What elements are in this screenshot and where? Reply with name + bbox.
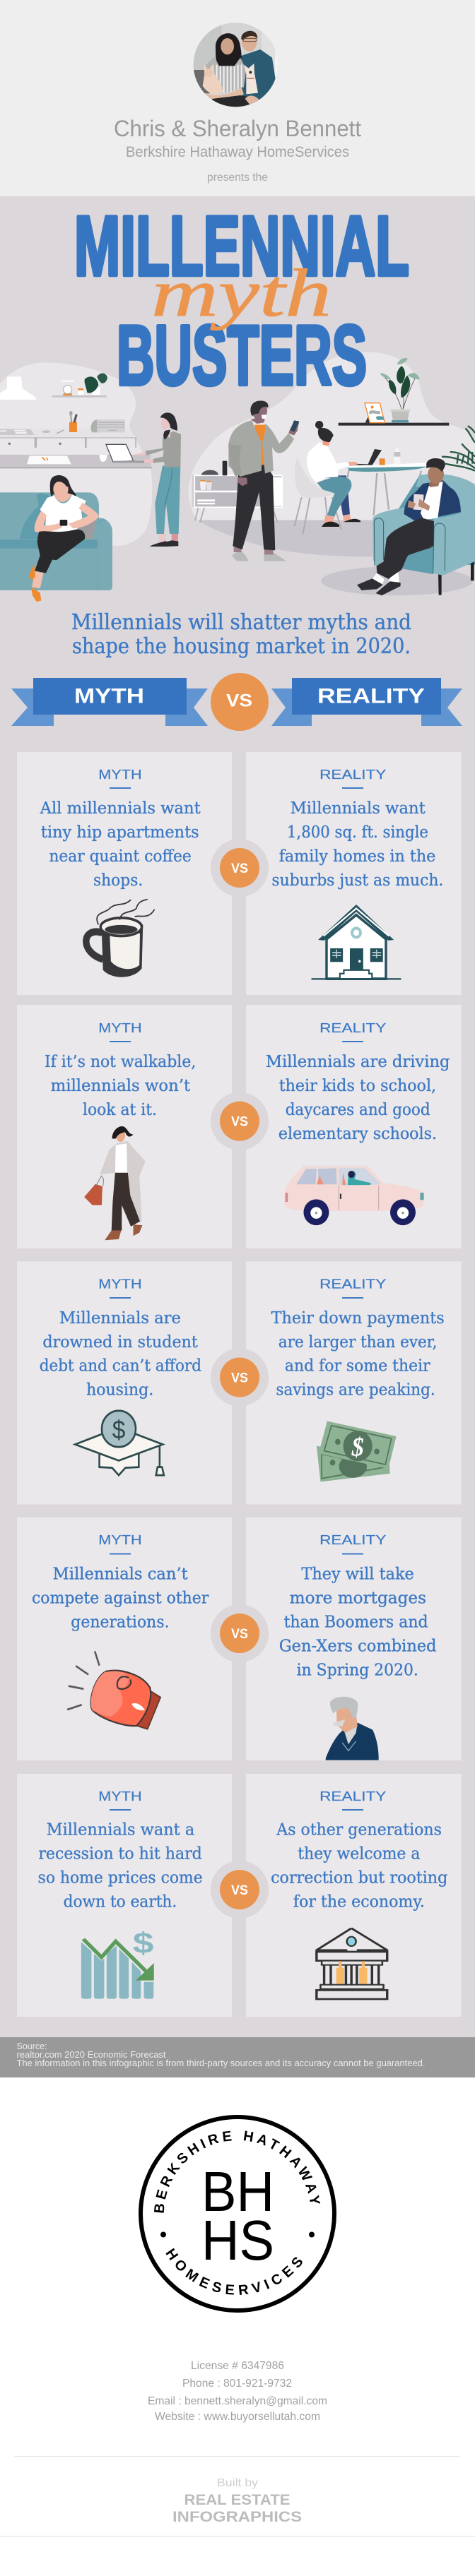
seated woman at table — [307, 421, 360, 527]
utensils — [69, 411, 77, 432]
reality label: REALITY — [319, 1789, 386, 1803]
contact details: Phone : 801-921-9732 — [182, 2378, 292, 2390]
living room illustration — [192, 358, 475, 595]
reality text: their kids to school, — [279, 1077, 436, 1095]
vs badge 2: VS — [231, 1115, 248, 1130]
island — [0, 455, 152, 468]
panel: myth 2 — [17, 1005, 232, 1248]
kitchen illustration — [0, 374, 181, 602]
ribbon: myth — [11, 678, 208, 726]
reality text: more mortgages — [290, 1589, 426, 1607]
myth text: generations. — [71, 1613, 170, 1631]
panel: reality 2 — [246, 1005, 462, 1248]
myth text — [40, 1309, 201, 1400]
myth text: tiny hip apartments — [41, 823, 199, 842]
vs badge 5: VS — [231, 1883, 248, 1898]
myth text: so home prices come — [38, 1869, 203, 1888]
myth text — [40, 799, 201, 890]
reality text: 1,800 sq. ft. single — [287, 823, 428, 842]
myth text: Millennials can’t — [53, 1565, 188, 1583]
icon: dollar bills — [317, 1421, 397, 1481]
myth text: shops. — [93, 871, 143, 890]
icon: coffee mug — [86, 900, 155, 977]
reality text: for the economy. — [293, 1893, 425, 1912]
icon: bank building — [317, 1928, 387, 1999]
myth text: recession to hit hard — [38, 1845, 202, 1864]
sofa and seated woman — [0, 475, 112, 602]
contact details — [148, 2360, 327, 2423]
wall shelf with scale and plant — [52, 374, 107, 398]
reality text: and for some their — [285, 1357, 430, 1376]
source band: The information in this infographic is from third-party sources and its accuracy cannot be guaranteed. — [17, 2058, 426, 2068]
reality text: Gen-Xers combined — [279, 1637, 437, 1655]
ribbon: reality — [271, 678, 462, 726]
reality text — [279, 1565, 437, 1679]
icon: car — [284, 1166, 424, 1225]
agent name: Chris & Sheralyn Bennett — [114, 116, 361, 141]
icon: dollar bills: $ — [351, 1432, 364, 1462]
vs badge 2 — [211, 1092, 269, 1150]
standing man — [228, 401, 299, 561]
ribbon: reality: REALITY — [317, 685, 425, 708]
myth text: Millennials are — [59, 1309, 181, 1328]
myth text: look at it. — [83, 1101, 157, 1119]
myth text: debt and can’t afford — [40, 1357, 201, 1376]
icon: house — [312, 905, 401, 979]
reality text: are larger than ever, — [278, 1333, 437, 1352]
source band — [0, 2037, 475, 2077]
myth text: near quaint coffee — [49, 847, 192, 866]
panel: reality 5 — [246, 1774, 462, 2017]
contact details: Email : bennett.sheralyn@gmail.com — [148, 2395, 327, 2407]
reality text: As other generations — [276, 1820, 442, 1839]
myth text: If it’s not walkable, — [45, 1053, 196, 1071]
reality text: elementary schools. — [278, 1125, 437, 1143]
BHHS logo: BERKSHIRE HATHAWAY — [154, 2131, 320, 2213]
icon: older man — [326, 1697, 379, 1760]
header background — [0, 0, 475, 196]
palm plant — [442, 426, 475, 471]
reality text — [271, 1309, 445, 1400]
vs badge 4: VS — [231, 1627, 248, 1642]
myth text — [32, 1565, 209, 1631]
BHHS logo: HS — [201, 2209, 274, 2272]
reality text: family homes in the — [279, 847, 435, 866]
source band: Source: — [17, 2041, 47, 2051]
myth label: MYTH — [98, 1789, 142, 1803]
vs badge 1: VS — [231, 861, 248, 876]
built by credit: INFOGRAPHICS — [172, 2509, 302, 2525]
built by credit — [172, 2477, 302, 2525]
reality text: in Spring 2020. — [297, 1661, 418, 1679]
reality text: daycares and good — [286, 1101, 430, 1119]
reality text: correction but rooting — [271, 1869, 448, 1888]
illustration background blobs — [0, 352, 475, 556]
agent photo — [194, 23, 276, 107]
panel: reality 4 — [246, 1517, 462, 1760]
reality text: They will take — [301, 1565, 414, 1583]
myth label: MYTH — [98, 1277, 142, 1292]
reality label: REALITY — [319, 1532, 386, 1547]
picture frame — [365, 403, 385, 423]
reality text: savings are peaking. — [276, 1381, 435, 1400]
title: myth script: myth — [151, 255, 332, 330]
myth text: compete against other — [32, 1589, 209, 1607]
myth text: down to earth. — [64, 1893, 177, 1912]
reality text: than Boomers and — [284, 1613, 428, 1631]
tagline — [71, 610, 411, 658]
cabinet — [192, 461, 283, 523]
myth label: MYTH — [98, 1532, 142, 1547]
range hood — [0, 376, 37, 400]
icon: falling price chart — [81, 1928, 154, 1999]
BHHS logo: HOMESERVICES — [165, 2248, 303, 2295]
reality text: Millennials are driving — [266, 1053, 450, 1071]
reality text — [266, 1053, 450, 1143]
reality text — [271, 1820, 448, 1912]
reality label: REALITY — [319, 767, 386, 782]
ribbon: myth: MYTH — [74, 685, 144, 708]
myth text: All millennials want — [40, 799, 201, 818]
icon: boxing glove — [67, 1651, 160, 1729]
built by credit: Built by — [217, 2477, 258, 2489]
panel: reality 1 — [246, 752, 462, 995]
BHHS logo: BH — [201, 2160, 274, 2223]
reality label: REALITY — [319, 1020, 386, 1035]
BHHS logo — [139, 2115, 336, 2313]
company name: Berkshire Hathaway HomeServices — [126, 144, 349, 160]
myth text — [45, 1053, 196, 1119]
myth text: millennials won’t — [51, 1077, 191, 1095]
icon: graduation cap with dollar coin: $ — [112, 1417, 125, 1445]
vs badge 3 — [211, 1349, 269, 1407]
source band: realtor.com 2020 Economic Forecast — [17, 2050, 166, 2060]
tagline: Millennials will shatter myths and — [71, 610, 411, 634]
plant on shelf — [380, 358, 420, 422]
panel: myth 5 — [17, 1774, 232, 2017]
panel: myth 3 — [17, 1261, 232, 1504]
panel: myth 1 — [17, 752, 232, 995]
presents the: presents the — [207, 172, 268, 184]
reality text: they welcome a — [298, 1845, 421, 1864]
reality label: REALITY — [319, 1277, 386, 1292]
vs badge main: VS — [226, 691, 252, 710]
built by credit: REAL ESTATE — [184, 2492, 290, 2508]
vs badge 5 — [211, 1861, 269, 1919]
myth label: MYTH — [98, 767, 142, 782]
myth text — [38, 1820, 203, 1912]
icon: walking woman — [84, 1126, 146, 1240]
white chair — [295, 458, 341, 535]
standing woman — [134, 412, 181, 547]
icon: graduation cap with dollar coin — [75, 1411, 164, 1475]
reality text: Millennials want — [291, 799, 426, 818]
contact details: Website : www.buyorsellutah.com — [155, 2411, 320, 2423]
vs badge main — [211, 673, 269, 731]
shelf — [339, 423, 449, 426]
tagline: shape the housing market in 2020. — [72, 634, 411, 658]
laptop — [106, 444, 144, 463]
reality text: Their down payments — [271, 1309, 445, 1328]
contact details: License # 6347986 — [191, 2360, 284, 2372]
vs badge 4 — [211, 1604, 269, 1662]
vs badge 3: VS — [231, 1371, 248, 1385]
vs badge 1 — [211, 839, 269, 897]
myth text: Millennials want a — [47, 1820, 194, 1839]
myth text: housing. — [86, 1381, 153, 1400]
myth label: MYTH — [98, 1020, 142, 1035]
counter — [0, 429, 136, 448]
floor shadows — [198, 520, 473, 595]
footer background — [0, 2077, 475, 2576]
reality text — [271, 799, 443, 890]
reality text: suburbs just as much. — [271, 871, 443, 890]
armchair and seated man — [357, 458, 475, 595]
panel: myth 4 — [17, 1517, 232, 1760]
main background — [0, 196, 475, 2037]
panel: reality 3 — [246, 1261, 462, 1504]
icon: falling price chart: $ — [133, 1928, 154, 1960]
toaster — [91, 419, 125, 432]
myth text: drowned in student — [42, 1333, 199, 1352]
table — [348, 448, 426, 515]
